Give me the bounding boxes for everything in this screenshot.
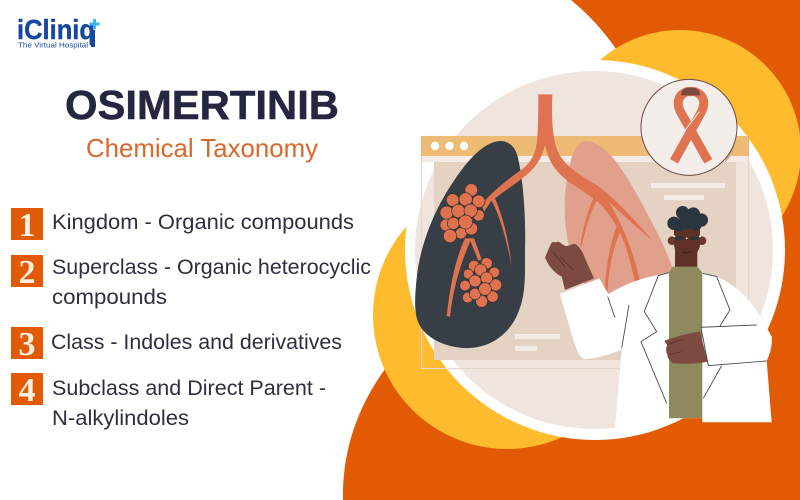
- subtitle: Chemical Taxonomy: [86, 133, 318, 163]
- doctor: white coat: [560, 273, 772, 428]
- illustration: lungs: [415, 94, 675, 348]
- alveoli clusters: [440, 184, 502, 307]
- browser window panel: [421, 136, 749, 368]
- list item 1: [11, 207, 354, 244]
- doctor: green shirt: [669, 267, 702, 418]
- illustration: doctor: [545, 206, 772, 428]
- list item 2: Superclass - Organic heterocyclic: [52, 256, 371, 279]
- list item 1: 1: [18, 207, 36, 244]
- list item 1: Kingdom - Organic compounds: [52, 211, 354, 234]
- list item 4: [11, 372, 326, 430]
- doctor: coat outlines: [553, 252, 767, 403]
- doctor: neck and head: [667, 206, 708, 270]
- list item 4: N-alkylindoles: [52, 407, 189, 430]
- list item 3: 3: [18, 326, 36, 363]
- icon: awareness ribbon badge: [641, 79, 737, 175]
- logo: The Virtual Hospital: [18, 40, 88, 50]
- background shapes: [343, 0, 800, 500]
- list item 3: [11, 326, 342, 363]
- light right lung: [565, 141, 675, 300]
- list item 4: Subclass and Direct Parent -: [52, 377, 326, 400]
- doctor: raised hand: [545, 242, 594, 290]
- doctor: sleeve: [701, 325, 772, 366]
- list item 4: 4: [18, 372, 36, 409]
- airways: [447, 94, 653, 317]
- doctor: hand on chest: [665, 332, 708, 364]
- list item 3: Class - Indoles and derivatives: [51, 331, 342, 354]
- logo: iCliniq: [17, 14, 95, 45]
- list item 2: [11, 254, 371, 309]
- title: OSIMERTINIB: [65, 82, 339, 128]
- list item 2: compounds: [52, 286, 167, 309]
- dark left lung: [415, 141, 525, 348]
- list item 2: 2: [18, 254, 36, 291]
